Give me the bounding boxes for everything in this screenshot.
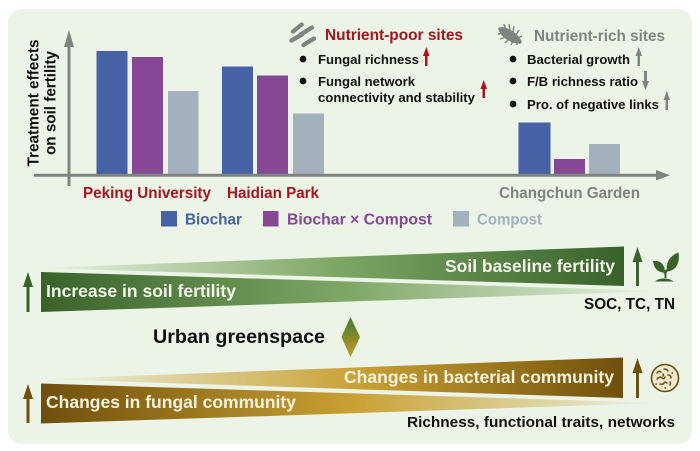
title: Urban greenspace: Urban greenspace — [153, 326, 325, 348]
legend: Biochar — [161, 211, 242, 228]
legend: Compost: Compost — [477, 212, 542, 228]
icon: grey down arrow — [642, 71, 649, 90]
site label: Haidian Park: Haidian Park — [227, 185, 320, 202]
arrow: bacterial community up right — [632, 358, 642, 398]
icon: plant seedling — [653, 252, 679, 282]
legend: Biochar x Compost: Biochar × Compost — [287, 212, 432, 228]
label: Soil baseline fertility: Soil baseline fertility — [445, 256, 615, 276]
legend — [161, 211, 542, 228]
bars: Changchun Garden — [518, 122, 620, 174]
bullet: proportion of negative links: Pro. of negative links — [527, 97, 659, 112]
icon: red up arrow — [480, 80, 487, 98]
label: Richness, functional traits, networks: Richness, functional traits, networks — [407, 414, 675, 431]
x axis arrow — [34, 170, 670, 180]
bullet: bacterial growth: Bacterial growth — [527, 52, 630, 67]
y axis label: Treatment effects — [26, 39, 42, 166]
y axis arrow — [64, 30, 74, 186]
bullet: fungal network: Fungal network — [318, 74, 416, 89]
arrow: fungal community up left — [23, 384, 33, 423]
icon: diamond — [342, 317, 360, 357]
wedge: increase in soil fertility — [41, 272, 660, 312]
bullet: fungal network: connectivity and stability — [318, 90, 476, 105]
bars: Haidian Park — [222, 66, 324, 174]
icon: fungal hyphae — [292, 24, 314, 45]
site label: Changchun Garden: Changchun Garden — [499, 185, 640, 202]
bar chart: treatment effects — [26, 30, 670, 202]
wedge: changes in fungal community — [41, 384, 660, 424]
label: Changes in fungal community: Changes in fungal community — [46, 392, 296, 412]
icon: grey up arrow — [664, 91, 670, 110]
icon: grey up arrow — [636, 47, 642, 66]
arrow: baseline fertility up right — [632, 247, 642, 286]
icon: bacterium — [498, 24, 522, 45]
icon: red up arrow — [423, 47, 430, 66]
bars: Peking University — [96, 51, 198, 174]
legend: Biochar: Biochar — [185, 212, 242, 228]
bullet: F/B richness ratio: F/B richness ratio — [527, 74, 638, 89]
wedge: changes in bacterial community — [45, 358, 623, 398]
site label: Peking University: Peking University — [83, 185, 212, 202]
wedge: soil baseline fertility — [40, 246, 624, 286]
heading: Nutrient-rich sites: Nutrient-rich sites — [534, 28, 665, 45]
label: SOC, TC, TN: SOC, TC, TN — [584, 296, 675, 313]
icon: microbes in a circle — [652, 364, 678, 392]
bullet: fungal richness: Fungal richness — [318, 52, 419, 67]
arrow: soil fertility up left — [23, 272, 33, 312]
panel: nutrient-rich sites — [498, 24, 670, 112]
bullet: fungal network — [300, 74, 476, 105]
y axis label second line: on soil fertility — [42, 51, 60, 155]
panel: nutrient-poor sites — [292, 24, 487, 105]
heading: Nutrient-poor sites: Nutrient-poor sites — [325, 27, 463, 44]
label: Increase in soil fertility: Increase in soil fertility — [46, 281, 236, 301]
label: Changes in bacterial community: Changes in bacterial community — [344, 367, 614, 387]
legend: Compost — [453, 211, 542, 228]
